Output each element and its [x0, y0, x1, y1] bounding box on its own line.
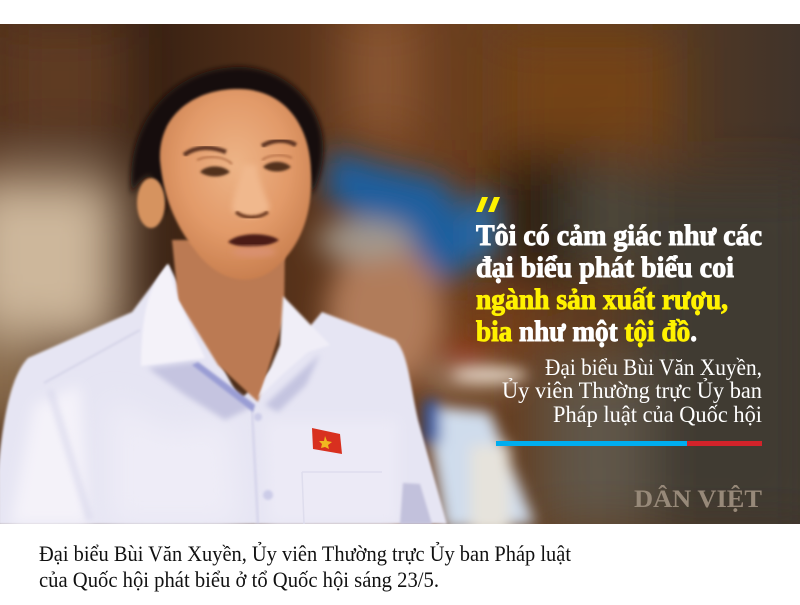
caption [39, 541, 572, 592]
quote text [476, 219, 762, 348]
quote text: bia như một tội đồ. [476, 315, 697, 348]
caption: Đại biểu Bùi Văn Xuyền, Ủy viên Thường trực Ủy ban Pháp luật [39, 541, 572, 566]
quote mark [476, 197, 500, 212]
attribution [502, 355, 762, 427]
shirt [0, 264, 447, 525]
collar [141, 264, 330, 412]
neck [172, 240, 285, 402]
mouth [228, 234, 279, 247]
attribution: Đại biểu Bùi Văn Xuyền, [545, 355, 762, 380]
quote text: ngành sản xuất rượu, [476, 283, 728, 316]
eyes [200, 166, 230, 176]
quote text: đại biểu phát biểu coi [476, 251, 734, 284]
hair [131, 67, 323, 215]
eyebrows [184, 148, 226, 155]
logo: Dân Việt: DÂN VIỆT [634, 485, 762, 513]
attribution: Ủy viên Thường trực Ủy ban [502, 378, 762, 403]
caption: của Quốc hội phát biểu ở tổ Quốc hội sáng 23/5. [39, 567, 439, 592]
attribution: Pháp luật của Quốc hội [553, 402, 762, 427]
icon: Vietnam flag pin [312, 428, 342, 454]
divider bar [496, 441, 762, 446]
nose [232, 165, 270, 217]
head [131, 67, 323, 280]
quote text: Tôi có cảm giác như các [476, 219, 762, 252]
